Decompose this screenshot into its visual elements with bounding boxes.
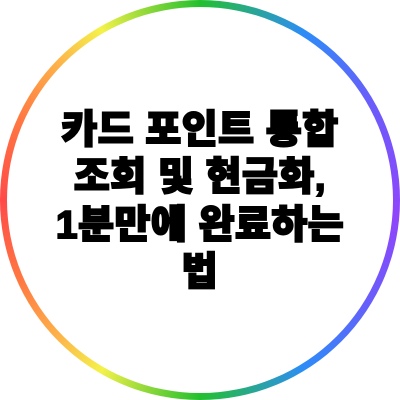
title: 법 bbox=[182, 251, 218, 294]
title: 조회 및 현금화, bbox=[74, 156, 326, 199]
title: 카드 포인트 통합 bbox=[61, 109, 339, 152]
title: 1분만에 완료하는 bbox=[56, 204, 344, 247]
